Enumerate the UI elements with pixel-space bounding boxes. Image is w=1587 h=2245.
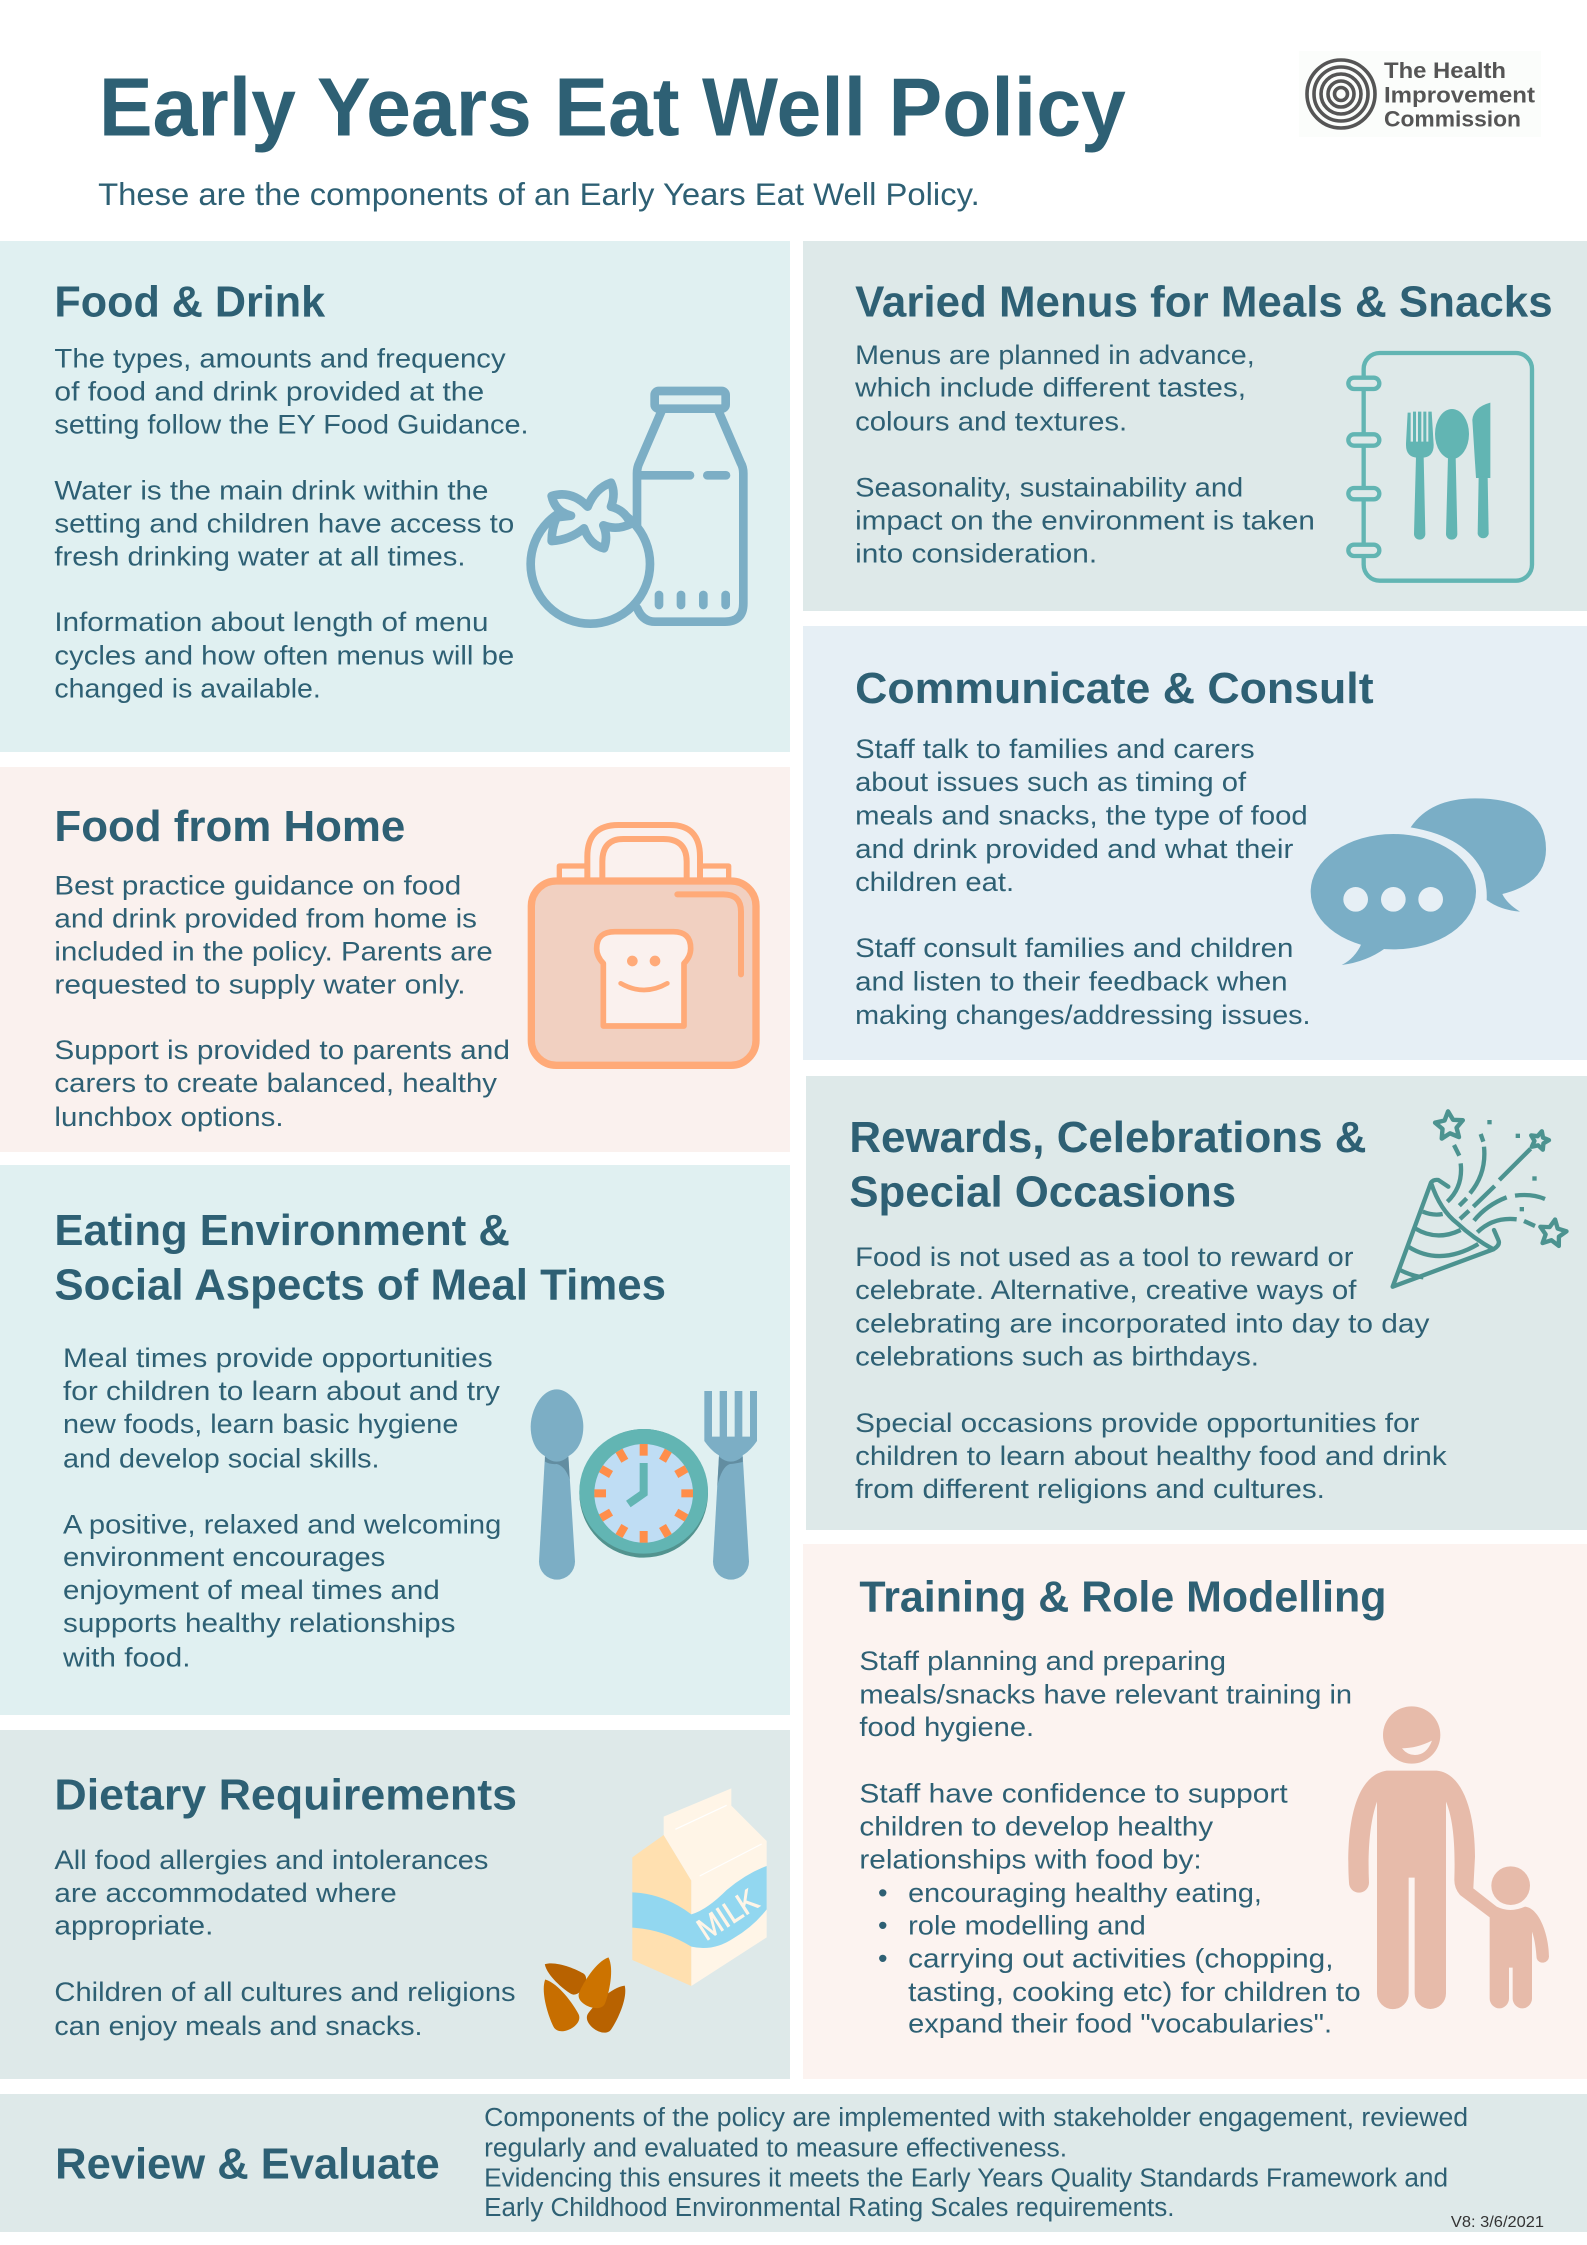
text: rewards and celebrations description: celebrate. Alternative, creative ways of: [855, 1274, 1357, 1305]
heading: Food & Drink: Food & Drink: [54, 278, 326, 327]
text: food and drink description: Water is the main drink within the: [54, 474, 488, 505]
heading: Training & Role Modelling: Training & Role Modelling: [859, 1572, 1386, 1621]
text: eating environment description: new foods, learn basic hygiene: [63, 1408, 458, 1439]
text: communicate and consult description: making changes/addressing issues.: [855, 999, 1311, 1030]
text: food from home description: [54, 869, 510, 1132]
text: food and drink description: setting follow the EY Food Guidance.: [54, 409, 529, 440]
text: food and drink description: The types, amounts and frequency: [54, 343, 506, 374]
logo: The Health Improvement Commission: The Health: [1384, 58, 1506, 83]
text: food and drink description: setting and children have access to: [54, 507, 514, 538]
text: varied menus description: Seasonality, sustainability and: [855, 471, 1243, 502]
panel: Food & Drink: [0, 241, 790, 752]
text: training description: children to develop healthy: [859, 1811, 1214, 1842]
heading: Rewards, Celebrations & Special Occasions: [849, 1113, 1366, 1216]
icon: spoon, clock and fork: [531, 1389, 757, 1580]
text: food and drink description: [54, 343, 529, 704]
text: communicate and consult description: children eat.: [855, 866, 1014, 897]
text: food from home description: included in the policy. Parents are: [54, 935, 493, 966]
title: Early Years Eat Well Policy: [99, 61, 1126, 153]
logo: The Health Improvement Commission: Commission: [1384, 106, 1521, 132]
text: eating environment description: environment encourages: [63, 1541, 385, 1572]
text: dietary requirements description: appropriate.: [54, 1910, 213, 1941]
text: review and evaluate description: Components of the policy are implemented with stakeholder engagement, reviewed: [484, 2104, 1468, 2132]
text: communicate and consult description: Staff consult families and children: [855, 932, 1293, 963]
icon: adult holding child's hand: [1348, 1706, 1549, 2009]
icon: milk carton and almonds: [533, 1788, 767, 2037]
heading: Eating Environment & Social Aspects of Meal Times: Eating Environment &: [54, 1206, 510, 1255]
heading: Rewards, Celebrations & Special Occasions: Special Occasions: [849, 1167, 1236, 1216]
heading: Rewards, Celebrations & Special Occasions: Rewards, Celebrations &: [849, 1113, 1366, 1162]
text: review and evaluate description: [484, 2104, 1468, 2222]
text: training description: Staff planning and preparing: [859, 1645, 1226, 1676]
icon: party popper with stars: [1393, 1110, 1568, 1287]
text: training description: •: [878, 1943, 888, 1974]
panel: Food from Home: [0, 767, 790, 1152]
text: varied menus description: into consideration.: [855, 538, 1097, 569]
text: training description: relationships with food by:: [859, 1843, 1202, 1874]
logo: The Health Improvement Commission: [1299, 51, 1541, 137]
text: training description: food hygiene.: [859, 1711, 1034, 1742]
text: food from home description: and drink provided from home is: [54, 902, 477, 933]
text: dietary requirements description: [54, 1844, 516, 2041]
text: training description: role modelling and: [908, 1910, 1146, 1941]
text: communicate and consult description: [855, 733, 1311, 1030]
heading: Communicate & Consult: Communicate & Consult: [855, 664, 1374, 713]
text: food from home description: lunchbox options.: [54, 1101, 284, 1132]
subtitle: These are the components of an Early Years Eat Well Policy.: [98, 176, 980, 212]
text: food and drink description: of food and drink provided at the: [54, 376, 484, 407]
text: food from home description: Support is provided to parents and: [54, 1034, 510, 1065]
text: communicate and consult description: and listen to their feedback when: [855, 965, 1288, 996]
text: review and evaluate description: Evidencing this ensures it meets the Early Years Quality Standards Framework and: [484, 2164, 1448, 2192]
panel: Varied Menus for Meals & Snacks: [803, 241, 1587, 611]
text: communicate and consult description: about issues such as timing of: [855, 766, 1247, 797]
panel: Communicate & Consult: [803, 626, 1587, 1060]
heading: Eating Environment & Social Aspects of Meal Times: Social Aspects of Meal Times: [54, 1261, 666, 1310]
text: food and drink description: changed is available.: [54, 673, 321, 704]
panel: Review & Evaluate: [0, 2094, 1587, 2232]
icon: lunch bag with smiling bread: [531, 825, 756, 1065]
text: training description: meals/snacks have relevant training in: [859, 1678, 1352, 1709]
text: communicate and consult description: Staff talk to families and carers: [855, 733, 1255, 764]
text: food from home description: requested to supply water only.: [54, 968, 466, 999]
text: training description: expand their food "vocabularies".: [908, 2008, 1332, 2039]
text: eating environment description: A positive, relaxed and welcoming: [63, 1508, 501, 1539]
text: rewards and celebrations description: celebrations such as birthdays.: [855, 1340, 1259, 1371]
heading: Review & Evaluate: Review & Evaluate: [55, 2140, 440, 2189]
text: training description: [859, 1645, 1361, 2039]
text: eating environment description: for children to learn about and try: [63, 1375, 500, 1406]
text: varied menus description: [854, 339, 1315, 569]
text: communicate and consult description: and drink provided and what their: [855, 833, 1293, 864]
text: training description: Staff have confidence to support: [859, 1778, 1288, 1809]
text: dietary requirements description: are accommodated where: [54, 1877, 397, 1908]
text: food and drink description: cycles and how often menus will be: [54, 640, 514, 671]
text: rewards and celebrations description: Special occasions provide opportunities for: [855, 1407, 1419, 1438]
text: training description: tasting, cooking etc) for children to: [908, 1976, 1361, 2007]
heading: Dietary Requirements: Dietary Requirements: [54, 1770, 517, 1819]
panel: Training & Role Modelling: [803, 1544, 1587, 2079]
text: dietary requirements description: can enjoy meals and snacks.: [54, 2010, 423, 2041]
panel: Dietary Requirements: [0, 1730, 790, 2079]
text: rewards and celebrations description: from different religions and cultures.: [855, 1473, 1325, 1504]
text: eating environment description: Meal times provide opportunities: [63, 1342, 493, 1373]
text: eating environment description: enjoyment of meal times and: [63, 1574, 440, 1605]
text: eating environment description: supports healthy relationships: [63, 1607, 455, 1638]
text: training description: carrying out activities (chopping,: [908, 1943, 1333, 1974]
text: training description: •: [878, 1877, 888, 1908]
text: eating environment description: with food.: [62, 1641, 190, 1672]
text: dietary requirements description: All food allergies and intolerances: [54, 1844, 488, 1875]
text: varied menus description: which include different tastes,: [854, 372, 1246, 403]
panel: Eating Environment & Social Aspects of Meal Times: [0, 1165, 790, 1715]
text: food from home description: Best practice guidance on food: [54, 869, 461, 900]
version note: V8: 3/6/2021: [1451, 2214, 1544, 2231]
heading: Varied Menus for Meals & Snacks: Varied Menus for Meals & Snacks: [855, 278, 1553, 327]
text: rewards and celebrations description: children to learn about healthy food and drink: [855, 1440, 1447, 1471]
text: training description: encouraging healthy eating,: [908, 1877, 1262, 1908]
text: rewards and celebrations description: celebrating are incorporated into day to day: [855, 1307, 1430, 1338]
heading: Eating Environment & Social Aspects of Meal Times: [54, 1206, 666, 1310]
text: eating environment description: [62, 1342, 501, 1672]
text: review and evaluate description: regularly and evaluated to measure effectiveness.: [484, 2134, 1067, 2162]
text: communicate and consult description: meals and snacks, the type of food: [855, 799, 1308, 830]
text: food and drink description: Information about length of menu: [54, 606, 488, 637]
text: dietary requirements description: Children of all cultures and religions: [54, 1976, 516, 2007]
text: eating environment description: and develop social skills.: [63, 1442, 380, 1473]
icon: speech bubbles: [1311, 798, 1546, 965]
text: varied menus description: Menus are planned in advance,: [855, 339, 1255, 370]
text: varied menus description: colours and textures.: [855, 405, 1127, 436]
text: rewards and celebrations description: [855, 1241, 1447, 1504]
text: rewards and celebrations description: Food is not used as a tool to reward or: [855, 1241, 1354, 1272]
text: review and evaluate description: Early Childhood Environmental Rating Scales requirements.: [484, 2194, 1174, 2222]
panel: Rewards, Celebrations & Special Occasions: [806, 1076, 1587, 1530]
logo: The Health Improvement Commission: Improvement: [1384, 82, 1536, 108]
text: food from home description: carers to create balanced, healthy: [54, 1067, 497, 1098]
icon: tomato and milk bottle: [531, 391, 743, 624]
text: food and drink description: fresh drinking water at all times.: [54, 541, 466, 572]
text: varied menus description: impact on the environment is taken: [855, 505, 1315, 536]
heading: Food from Home: Food from Home: [54, 802, 405, 851]
icon: menu book with cutlery: [1348, 353, 1532, 581]
text: training description: •: [878, 1910, 888, 1941]
icon: milk carton and almonds: MILK: [691, 1882, 765, 1947]
